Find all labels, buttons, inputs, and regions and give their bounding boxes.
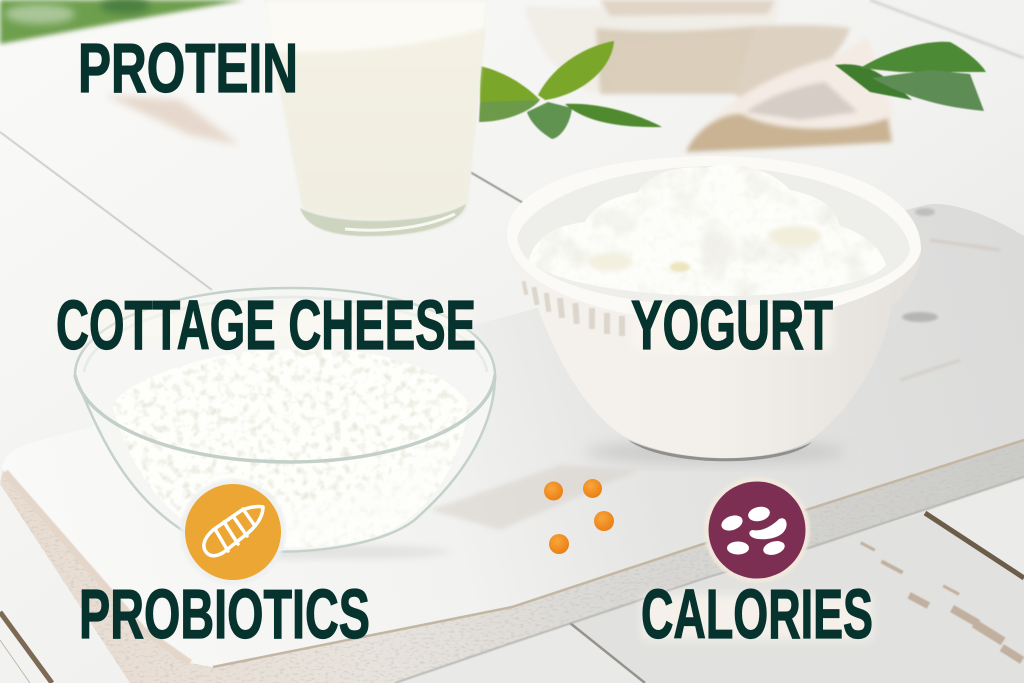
icon: probiotics bbox=[180, 479, 286, 585]
orange lentils bbox=[544, 479, 614, 554]
heading: calories: CALORIES bbox=[641, 575, 873, 653]
heading: probiotics: PROBIOTICS bbox=[79, 575, 370, 653]
heading: yogurt: YOGURT bbox=[631, 286, 833, 364]
cottage cheese glass bowl bbox=[75, 288, 495, 560]
yogurt bowl bbox=[507, 155, 921, 461]
linen towel and bowl bbox=[525, 0, 892, 152]
heading: cottage cheese: COTTAGE CHEESE bbox=[56, 286, 476, 364]
icon: calories bbox=[704, 477, 810, 583]
title: protein: PROTEIN bbox=[78, 29, 298, 107]
basil leaves bbox=[479, 41, 986, 139]
glass of milk bbox=[264, 0, 488, 237]
text glow behind labels bbox=[60, 304, 872, 640]
cutting board bbox=[0, 204, 1024, 683]
shadow under bowls bbox=[190, 440, 845, 559]
